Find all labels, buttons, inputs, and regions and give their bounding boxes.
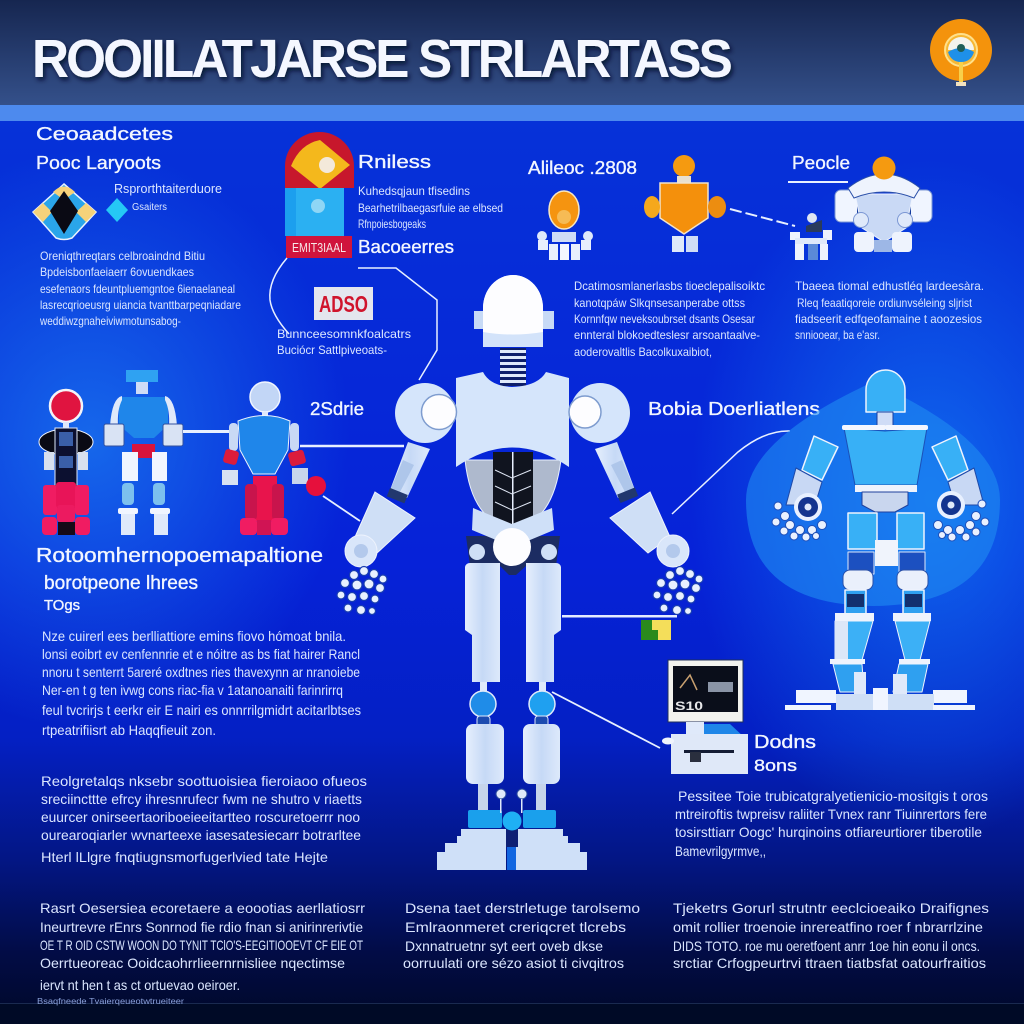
panel: top left text block: Rsprorthtaiterduore <box>114 181 222 196</box>
head <box>474 275 554 347</box>
caption under ADSO: Bunnceesomnkfoalcatrs <box>277 327 411 341</box>
panel: left paragraph 3: Ineurtrevre rEnrs Sonrnod fie rdio fnan si anirinrerivtie <box>40 919 363 935</box>
panel: left paragraph 3: OE T R OID CSTW WOON DO TYNIT TClO'S-EEGITIOOEVT CF EIE OT <box>40 937 363 953</box>
icon: computer: S10 <box>675 699 703 713</box>
footer note: Bsaqfneede Tvaierqeueotwtrueiteer <box>37 997 184 1006</box>
heading: Ceoaadcetes <box>36 124 173 144</box>
caption under ADSO <box>277 327 411 357</box>
heading: Peocle: Peocle <box>792 153 850 173</box>
label: ADSO <box>314 287 373 320</box>
main central robot <box>337 275 703 870</box>
left shoulder and arm <box>337 383 456 614</box>
neck <box>500 348 526 386</box>
panel: left paragraph 2: Reolgretalqs nksebr soottuoisiea fieroiaoo ofueos <box>41 773 367 789</box>
panel: top right body text: Tbaeea tiomal edhustléq lardeesàra. <box>795 279 984 293</box>
heading: Peocle <box>788 153 850 183</box>
label: ADSO: ADSO <box>319 291 368 317</box>
right shoulder and arm <box>569 383 703 614</box>
panel: left paragraph 3: iervt nt hen t as ct ortuevao oeiroer. <box>40 977 240 993</box>
panel: mid right text <box>675 788 988 859</box>
dashed connector <box>730 209 795 226</box>
panel: top centre body text: Dcatimosmlanerlasbs tioeclepalisoiktc <box>574 279 765 293</box>
abdomen <box>465 452 561 524</box>
connector between robots <box>183 430 229 433</box>
header logo icon <box>930 19 992 86</box>
panel: top left text block: Gsaiters <box>132 202 167 213</box>
body text: weddiwzgnaheiviwmotunsabog- <box>39 314 181 328</box>
icon: chip <box>641 620 671 640</box>
panel: bottom right text <box>673 900 989 971</box>
connector: hand to chip <box>562 615 677 618</box>
left middle headings: TOgs <box>44 597 80 614</box>
panel: top centre body text <box>574 279 765 359</box>
panel: bottom centre text: Emlraonmeret creriqcret tlcrebs <box>405 919 626 935</box>
panel: robotics text block: Kuhedsqjaun tfisedins <box>358 184 470 198</box>
title: ROOIILATJARSE STRLARTASS <box>32 29 731 89</box>
panel: bottom centre text <box>403 900 640 971</box>
torso <box>456 372 569 467</box>
panel: left paragraph 2: sreciincttte efrcy ihresnrufecr fwm ne shutro v riaetts <box>41 791 362 807</box>
panel: bottom right text: Tjeketrs Gorurl strutntr eeclcioeaiko Draifignes <box>673 900 989 916</box>
label: Dodns: 8ons <box>754 756 797 775</box>
panel: left paragraph 1: lonsi eoibrt ev cenfennrie et e nóitre as bs fiat hairer Rancl <box>42 646 360 662</box>
panel: left paragraph 2 <box>41 773 367 865</box>
icon: red, yellow and blue badge <box>285 132 354 258</box>
left middle headings <box>36 545 323 614</box>
icon: middle left robot <box>104 370 183 535</box>
icon: diamond <box>33 184 96 240</box>
panel: left paragraph 2: euurcer onirseertaoriboeieeitartteo roscuretoerrr noo <box>41 809 360 825</box>
icon: orange robot shield <box>644 155 726 252</box>
panel: robotics text block <box>358 152 503 257</box>
connector curve to right robot <box>672 431 790 514</box>
icon: left robot with red head <box>39 390 93 535</box>
heading: Bobia Doerliatlens: Bobia Doerliatlens <box>648 399 820 419</box>
icon: computer <box>662 660 748 774</box>
subheading: Pooc Laryoots <box>36 153 161 173</box>
panel: bottom centre text: Dxnnatruetnr syt eert oveb dkse <box>405 938 603 954</box>
label: 2Sdrie: 2Sdrie <box>310 399 364 419</box>
panel: left paragraph 3 <box>40 900 365 993</box>
panel: mid right text: Bamevrilgyrmve,, <box>675 843 766 859</box>
heading: top centre: Alileoc .2808 <box>528 158 637 178</box>
panel: top right body text: snniooear, ba e'asr. <box>795 328 880 342</box>
panel: top centre body text: ennteral blokoedteslesr arsoantaalve- <box>574 328 760 342</box>
panel: robotics text block: Bacoeerres <box>358 237 454 257</box>
panel: robotics text block: Rfnpoiesbogeaks <box>358 217 426 231</box>
icon: orange robot small <box>537 191 593 260</box>
panel: left paragraph 1: rtpeatrifiisrt ab Haqqfieuit zon. <box>42 722 216 738</box>
panel: left paragraph 1: Nze cuirerl ees berlliattiore emins fiovo hómoat bnila. <box>42 628 346 644</box>
panel: left paragraph 2: ourearoqiarler wvnarteexe iasesatesiecarr botrarltee <box>41 827 361 843</box>
body text: esefenaors fdeuntpluemgntoe 6ienaelaneal <box>40 282 235 296</box>
icon: right blue robot <box>772 370 989 710</box>
panel: left paragraph 2: Hterl lLlgre fnqtiugnsmorfugerlvied tate Hejte <box>41 849 328 865</box>
panel: left paragraph 1: nnoru t senterrt 5areré oxdtnes ries thavexynn ar nranoiebe <box>42 664 360 680</box>
connector lines to main robot left arm <box>300 446 404 521</box>
panel: bottom right text: DIDS TOTO. roe mu oeretfoent anrr 1oe hin eonu il oncs. <box>673 938 980 954</box>
panel: left paragraph 3: Rasrt Oesersiea ecoretaere a eoootias aerllatiosrr <box>40 900 365 916</box>
body text: lasrecqrioeusrg uiancia tvanttbarpeqniadare <box>40 298 241 312</box>
panel: robotics text block: Bearhetrilbaegasrfuie ae elbsed <box>358 201 503 215</box>
panel: top right body text: fiadseerit edfqeofamaine t aoozesios <box>795 312 982 326</box>
label: Dodns: Dodns <box>754 732 816 752</box>
panel: left paragraph 1: Ner-en t g ten ivwg cons riac-fia v 1atanoanaiti farinrirrq <box>42 682 343 698</box>
header band <box>0 0 1024 121</box>
panel: left paragraph 1: feul tvcrirjs t eerkr eir E nairi es onnrrilgmidrt acitarlbtses <box>42 702 361 718</box>
left leg <box>465 563 504 828</box>
right leg <box>523 563 561 828</box>
panel: mid right text: tosirsttiarr Oogc' hurqinoins otfiareurtiorer tiberotile <box>675 824 982 840</box>
icon: red, yellow and blue badge: EMIT3IAAL <box>292 240 346 255</box>
panel: bottom centre text: oorruulati ore sézo asiot ti civqitros <box>403 955 624 971</box>
panel: top centre body text: Kornnfqw neveksoubrset dsants Osesar <box>574 312 755 326</box>
connector: knee to computer <box>552 692 660 748</box>
panel: bottom right text: omit rollier troenoie inrereatfino roer f nbrarrlzine <box>673 919 983 935</box>
pelvis <box>466 508 560 575</box>
feet and base <box>437 789 587 870</box>
left middle headings: borotpeone lhrees <box>44 573 198 594</box>
left middle headings: Rotoomhernopoemapaltione <box>36 545 323 567</box>
panel: bottom right text: srctiar Crfogpeurtrvi ttraen tiatbsfat oatourfraitios <box>673 955 986 971</box>
body text: Oreniqthreqtars celbroaindnd Bitiu <box>40 249 205 263</box>
panel: top right body text <box>795 279 984 342</box>
panel: robotics text block: Rniless <box>358 152 431 172</box>
panel: bottom centre text: Dsena taet derstrletuge tarolsemo <box>405 900 640 916</box>
panel: top centre body text: aoderovaltlis Bacolkuxaibiot, <box>574 345 712 359</box>
icon: robot with round head <box>222 382 326 535</box>
icon: large white robot <box>835 156 932 252</box>
body text <box>39 249 241 328</box>
panel: top right body text: Rleq feaatiqoreie ordiunvséleing sljrist <box>797 296 973 310</box>
right blue robot halo <box>746 382 1000 606</box>
body text: Bpdeisbonfaeiaerr 6ovuendkaes <box>40 265 194 279</box>
panel: top centre body text: kanotqpáw Slkqnsesanperabe ottss <box>574 296 745 310</box>
panel: mid right text: mtreiroftis twpreisv raliiter Tvnex ranr Tiuinrertors fere <box>675 806 987 822</box>
icon: small cyan diamond <box>106 198 128 222</box>
panel: left paragraph 3: Oerrtueoreac Ooidcaohrrlieernrnisliee nqectimse <box>40 955 345 971</box>
panel: left paragraph 1 <box>42 628 361 738</box>
panel: mid right text: Pessitee Toie trubicatgralyetienicio-mositgis t oros <box>678 788 988 804</box>
panel: top left text block <box>33 124 241 328</box>
label: Dodns <box>754 732 816 775</box>
icon: small white robot <box>790 213 832 260</box>
caption under ADSO: Buciócr Sattlpiveoats- <box>277 343 387 357</box>
connector lines to head and shoulder <box>270 258 437 380</box>
